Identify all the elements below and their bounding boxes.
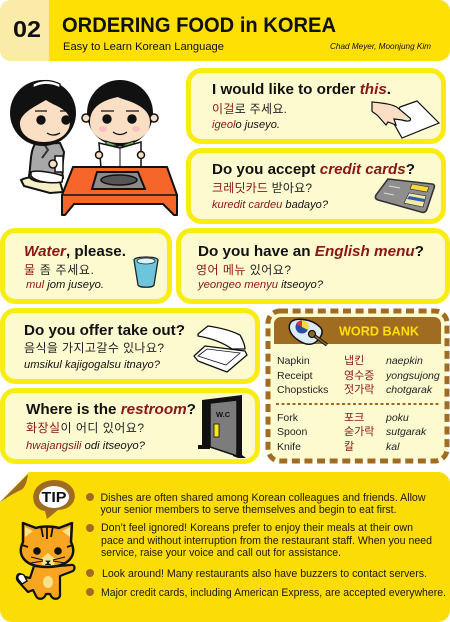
panel: word bank — [268, 311, 447, 461]
tip bullets: your senior members to serve themselves and begin to eat first. — [100, 504, 396, 516]
word list: chotgarak — [386, 384, 433, 396]
panel: order this: 이걸로 주세요. — [212, 102, 287, 116]
tip speech bubble: TIP — [42, 490, 67, 506]
word list: 칼 — [344, 440, 354, 453]
header banner: ORDERING FOOD in KOREA — [62, 14, 336, 37]
word list: sutgarak — [386, 426, 427, 438]
panel: restroom: 화장실이 어디 있어요? — [26, 421, 144, 435]
panel: English menu: yeongeo menyu itseoyo? — [197, 279, 324, 291]
tip bullets — [86, 492, 446, 599]
word list: Spoon — [277, 426, 308, 438]
word list: Fork — [277, 412, 299, 424]
word list: 영수증 — [344, 369, 374, 382]
panel: word bank: WORD BANK — [339, 324, 420, 338]
icon: WC door: W.C — [216, 410, 231, 419]
panel: order this: I would like to order this. — [212, 81, 391, 98]
word list: 냅킨 — [344, 354, 364, 367]
panel: water: Water, please. — [24, 243, 126, 260]
panel: English menu — [178, 230, 448, 302]
panel: water: mul jom juseyo. — [26, 279, 104, 291]
diner figure — [82, 80, 158, 172]
icon: hand pointing at paper — [372, 101, 439, 138]
word list: poku — [385, 412, 409, 424]
word list: Knife — [277, 441, 301, 453]
panel: English menu: 영어 메뉴 있어요? — [196, 263, 291, 277]
word list — [276, 354, 441, 453]
panel: credit cards: 크레딧카드 받아요? — [212, 181, 312, 195]
panel: order this — [188, 70, 444, 142]
header banner: Chad Meyer, Moonjung Kim — [330, 41, 431, 51]
word list: naepkin — [386, 355, 423, 367]
icon: takeout box — [194, 326, 247, 372]
icon: glass of water — [134, 257, 158, 287]
tip bullets: pace and without interruption from the restaurant staff. When you need — [101, 535, 432, 547]
header banner — [0, 0, 450, 61]
server figure — [10, 80, 76, 193]
tip bullets: Dishes are often shared among Korean colleagues and friends. Allow — [100, 492, 426, 504]
panel: water: 물 좀 주세요. — [24, 263, 94, 277]
panel: water — [2, 230, 170, 302]
word list: 숟가락 — [344, 425, 374, 438]
panel: take out: Do you offer take out? — [24, 322, 185, 339]
header banner: Easy to Learn Korean Language — [63, 41, 224, 53]
panel: take out — [2, 310, 258, 382]
word list: Chopsticks — [277, 384, 328, 396]
panel: restroom: Where is the restroom? — [26, 401, 196, 418]
table with grill — [62, 167, 177, 215]
word list: 포크 — [344, 412, 364, 424]
panel: order this: igeolo juseyo. — [212, 119, 280, 131]
illustration: diners at table — [10, 80, 177, 215]
panel: take out: 음식을 가지고갈수 있나요? — [24, 341, 164, 355]
panel: tips — [0, 472, 450, 622]
icon: cat mascot — [17, 523, 74, 599]
panel: credit cards — [188, 150, 444, 222]
icon: WC door — [198, 395, 246, 458]
word list: kal — [386, 441, 400, 453]
tip speech bubble — [33, 480, 75, 519]
panel: credit cards: kuredit cardeu badayo? — [212, 199, 329, 211]
icon: fan — [289, 319, 327, 345]
word list: 젓가락 — [344, 383, 374, 396]
word list: Napkin — [277, 355, 310, 367]
panel: take out: umsikul kajigogalsu itnayo? — [24, 359, 161, 371]
word list: yongsujong — [385, 370, 440, 382]
tip bullets: Don’t feel ignored! Koreans prefer to enjoy their meals at their own — [101, 522, 413, 534]
tip bullets: service, raise your voice and call out for assistance. — [101, 547, 341, 559]
header banner: 02 — [13, 16, 41, 42]
icon: card reader — [375, 179, 434, 212]
panel: English menu: Do you have an English menu? — [198, 243, 424, 260]
panel: restroom — [2, 390, 258, 462]
word list: Receipt — [277, 370, 313, 382]
tip bullets: Major credit cards, including American Express, are accepted everywhere. — [101, 587, 446, 599]
panel: restroom: hwajangsili odi itseoyo? — [26, 440, 146, 452]
panel: credit cards: Do you accept credit cards? — [212, 161, 415, 178]
tip bullets: Look around! Many restaurants also have buzzers to contact servers. — [102, 568, 427, 580]
